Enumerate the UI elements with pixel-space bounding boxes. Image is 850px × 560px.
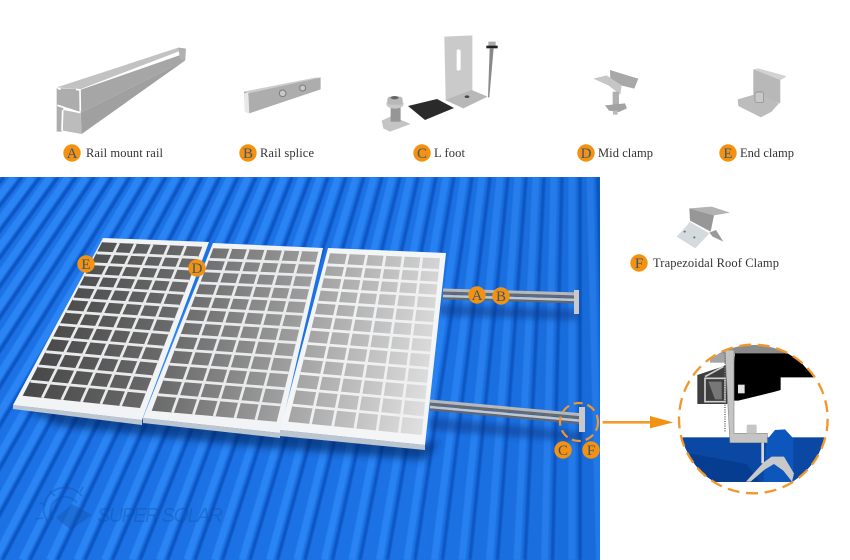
badge: E bbox=[719, 144, 737, 162]
label: end clamp: End clamp bbox=[740, 146, 794, 160]
badge: A on rail bbox=[468, 286, 486, 304]
label: L foot: L foot bbox=[434, 146, 466, 160]
label: mid clamp: Mid clamp bbox=[598, 146, 653, 160]
component: mid clamp bbox=[577, 70, 653, 162]
badge letter: C: C bbox=[417, 146, 427, 162]
label: rail splice: Rail splice bbox=[260, 146, 314, 160]
badge: C on roof bbox=[554, 441, 572, 459]
badge: E on panel bbox=[77, 255, 95, 273]
detail: grey panel underside bbox=[718, 345, 788, 354]
badge: D on panel: D bbox=[192, 261, 203, 277]
detail: dashed orange ring bbox=[679, 345, 828, 493]
detail: L foot bracket bbox=[725, 350, 767, 443]
component: rail splice bbox=[239, 77, 321, 162]
badge: B on rail bbox=[492, 287, 510, 305]
badge: C on roof: C bbox=[558, 443, 568, 459]
rail end bracket: upper bbox=[574, 290, 579, 314]
badge: C bbox=[413, 144, 431, 162]
badge letter: B: B bbox=[243, 146, 253, 162]
icon: rail bbox=[57, 48, 186, 134]
shadow: beneath rails bbox=[430, 304, 582, 442]
badge letter: E: E bbox=[723, 146, 733, 162]
label: trapezoidal roof clamp: Trapezoidal Roof Clamp bbox=[653, 256, 779, 270]
component: L foot bbox=[382, 35, 498, 162]
detail: black panel frame bbox=[730, 353, 814, 401]
roof panel: corrugated blue roof bbox=[0, 177, 608, 560]
logo: panel bbox=[56, 504, 92, 530]
icon: end clamp bbox=[738, 68, 786, 117]
detail: bracket ribs bbox=[724, 353, 726, 432]
detail: rail section bbox=[697, 353, 727, 404]
rail: upper mounting rail bbox=[443, 290, 579, 314]
icon: splice bbox=[244, 77, 321, 113]
detail view: clamp cross-section bbox=[677, 343, 830, 493]
detail: bolts bbox=[738, 385, 757, 433]
badge: A on rail: A bbox=[472, 288, 483, 304]
badge letter: D: D bbox=[581, 146, 592, 162]
component: end clamp bbox=[719, 68, 794, 162]
rail: lower mounting rail bbox=[430, 401, 585, 432]
watermark logo bbox=[36, 484, 223, 530]
component: rail mount rail bbox=[57, 48, 186, 162]
shadow: beneath panels bbox=[20, 406, 440, 460]
solar panel: right bbox=[280, 248, 446, 450]
icon: black plate bbox=[408, 99, 454, 120]
label: rail mount rail: Rail mount rail bbox=[86, 146, 164, 160]
logo: rays bbox=[36, 484, 83, 519]
badge: E on panel: E bbox=[81, 257, 91, 273]
dashed circle: roof clamp highlight bbox=[560, 403, 598, 441]
icon: mid clamp bbox=[593, 70, 638, 115]
badge: F bbox=[630, 254, 648, 272]
component: trapezoidal roof clamp bbox=[630, 207, 779, 272]
badge letter: A: A bbox=[67, 146, 78, 162]
badge: F on roof: F bbox=[587, 443, 595, 459]
badge: D bbox=[577, 144, 595, 162]
badge: B on rail: B bbox=[496, 289, 506, 305]
badge: A bbox=[63, 144, 81, 162]
rail end bracket: lower bbox=[579, 407, 585, 432]
badge: B bbox=[239, 144, 257, 162]
icon: L bracket and screw bbox=[444, 35, 498, 108]
icon: T bolt bbox=[382, 96, 411, 132]
solar panel: middle bbox=[143, 243, 323, 438]
icon: trapezoidal clamp bbox=[677, 207, 730, 248]
watermark text: SUPER SOLAR bbox=[97, 505, 223, 527]
arrow: to detail view bbox=[603, 416, 673, 428]
detail: roof clamp bbox=[746, 443, 794, 482]
detail: blue roof bbox=[682, 429, 825, 482]
solar panel: left bbox=[13, 238, 209, 425]
badge letter: F: F bbox=[635, 256, 643, 272]
logo: sun arcs bbox=[44, 488, 82, 522]
badge: F on roof bbox=[582, 441, 600, 459]
badge: D on panel bbox=[188, 259, 206, 277]
